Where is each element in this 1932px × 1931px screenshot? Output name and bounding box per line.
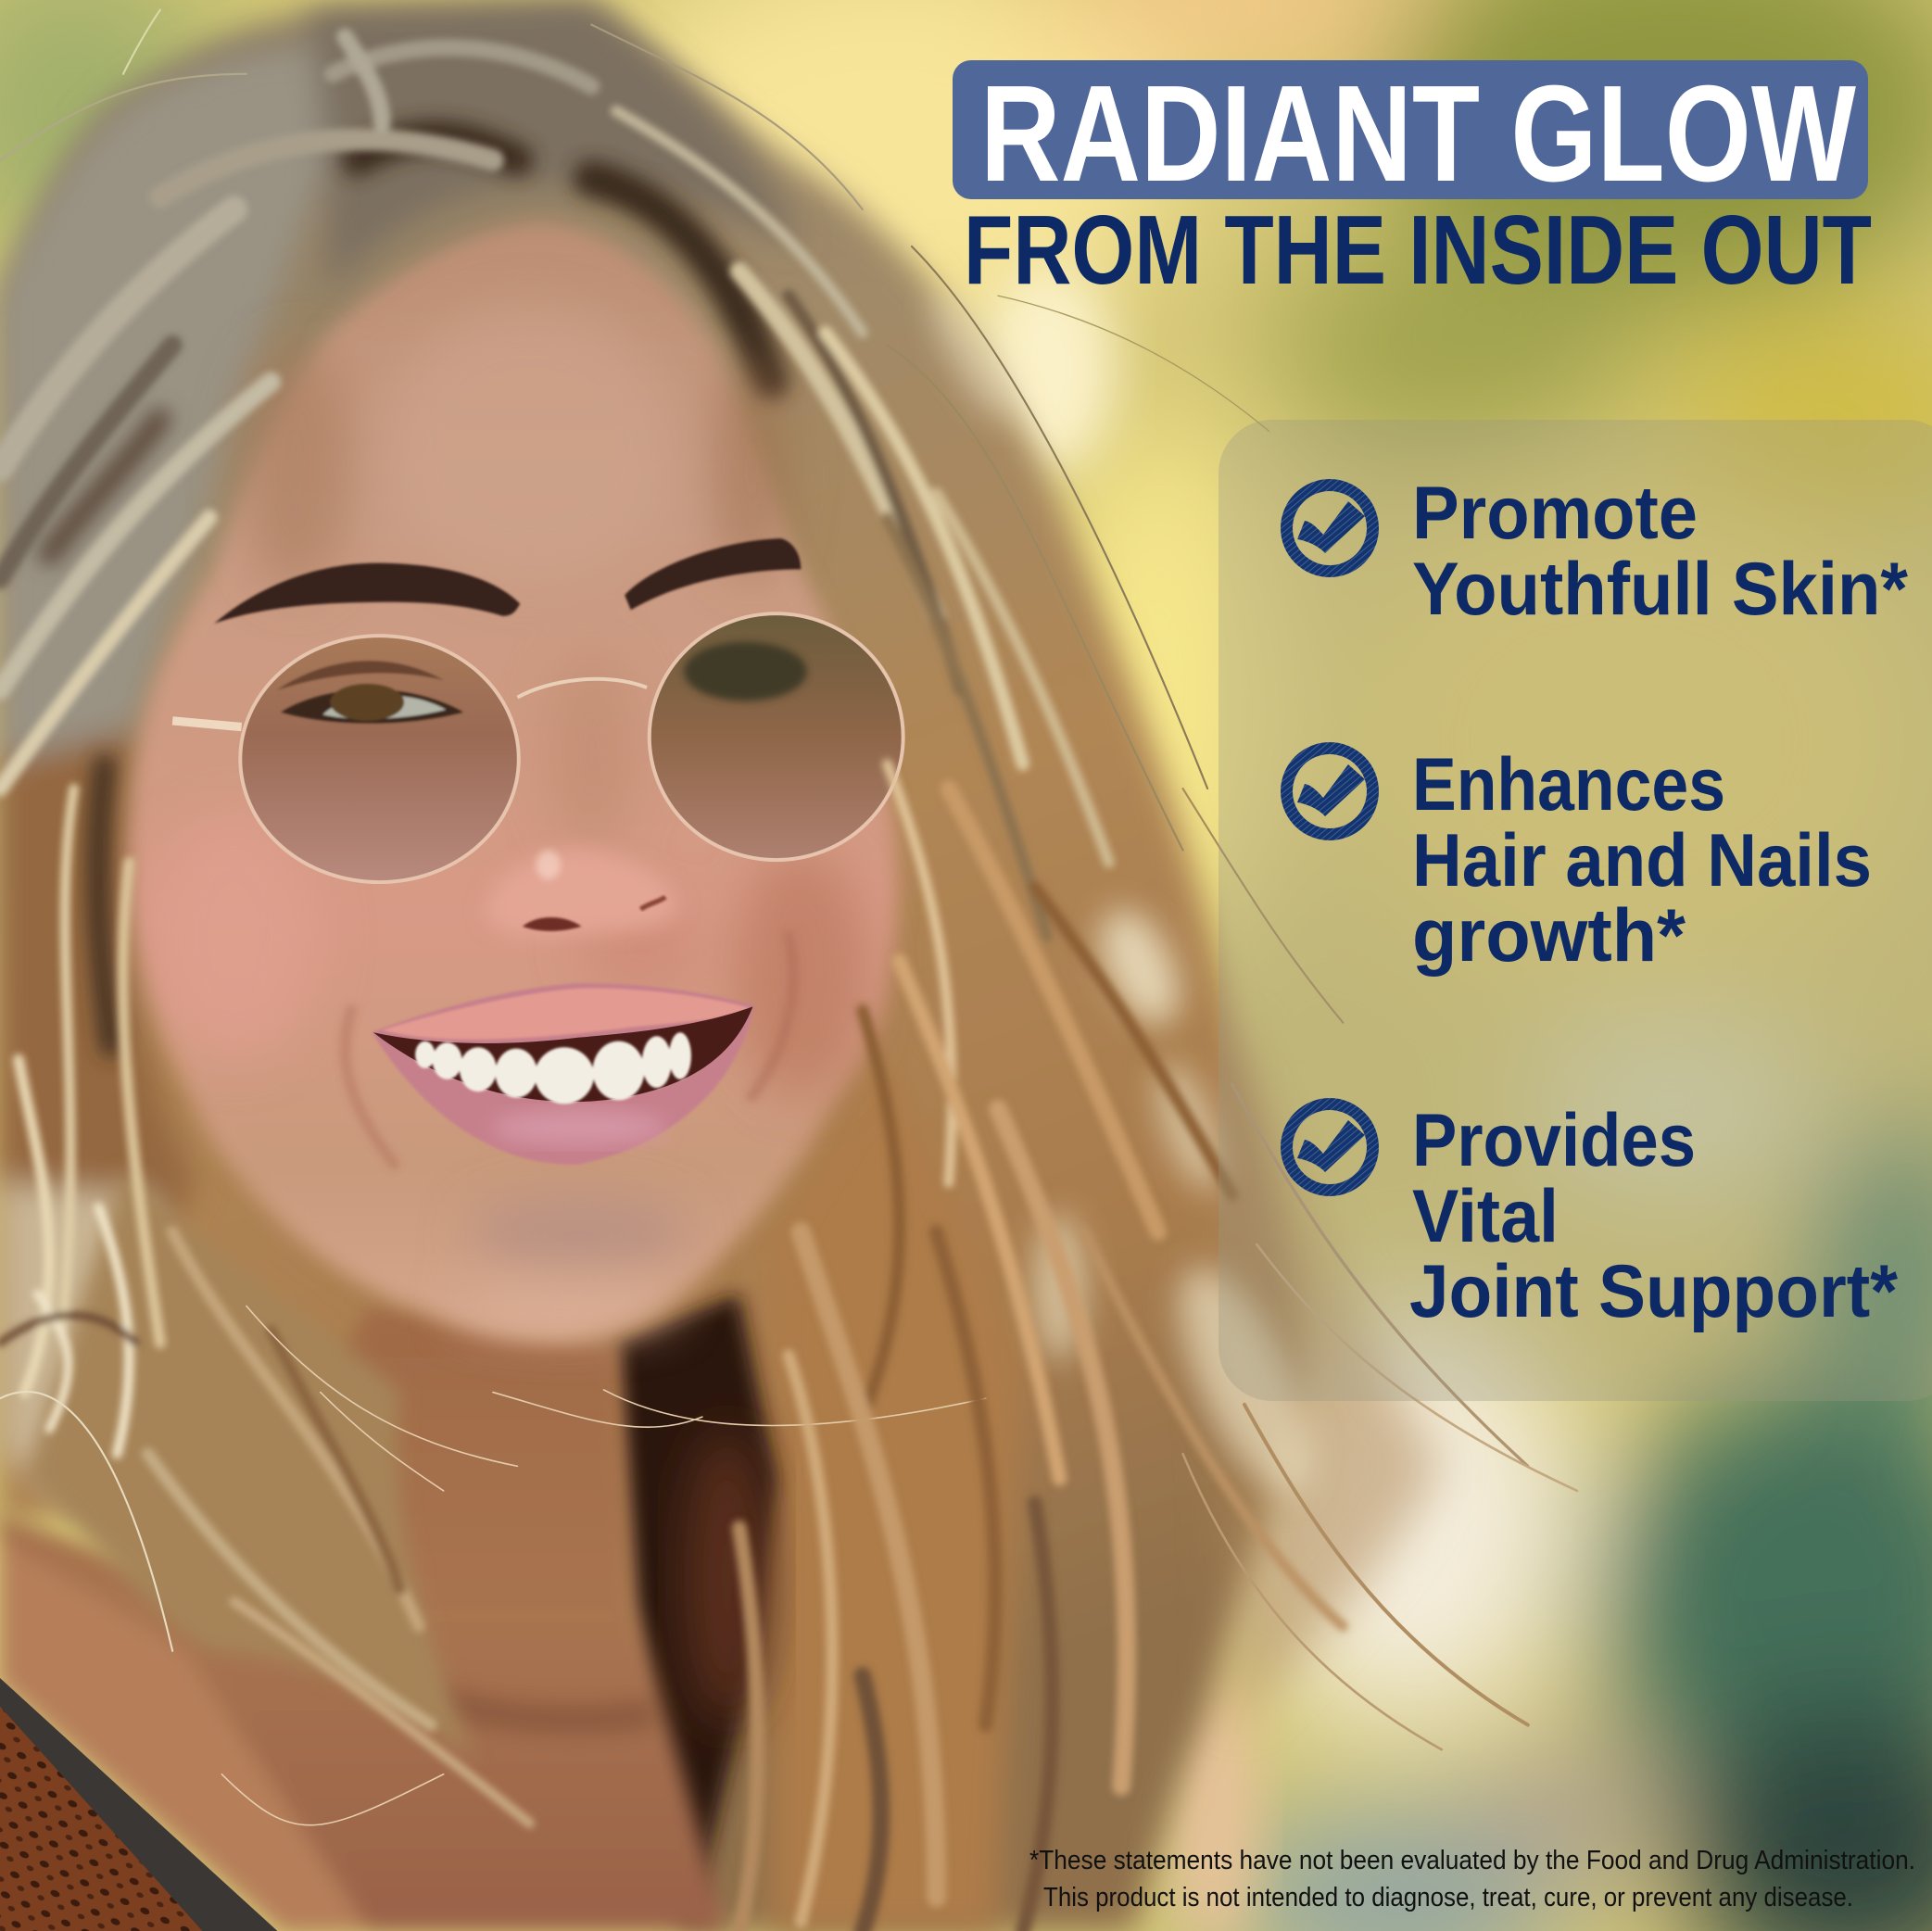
benefit text 3: Provides xyxy=(1412,1099,1696,1182)
benefit text 2: Hair and Nails xyxy=(1412,819,1872,902)
sunglasses xyxy=(172,613,903,882)
bright gaps between hair strands xyxy=(917,283,1337,1510)
hair strands over the face edge and shoulders xyxy=(0,37,1343,1931)
benefit 1 xyxy=(1286,472,1908,631)
neck and chest xyxy=(0,1306,727,1931)
hair lying across the neck xyxy=(25,1170,986,1825)
disclaimer: This product is not intended to diagnose, treat, cure, or prevent any disease. xyxy=(1043,1883,1853,1912)
grey-blonde crown and left side xyxy=(0,5,1023,1931)
wispy flyaway hairs xyxy=(0,10,1577,1749)
benefit text 2: Enhances xyxy=(1412,743,1725,827)
dark hairline shadows xyxy=(49,137,770,1047)
benefit text 1: Youthfull Skin* xyxy=(1412,548,1908,631)
benefit text 3: Vital xyxy=(1412,1175,1559,1258)
disclaimer xyxy=(1029,1846,1915,1912)
benefit text 1: Promote xyxy=(1412,472,1698,555)
benefit 2 xyxy=(1286,743,1872,978)
benefit text 2: growth* xyxy=(1412,894,1686,978)
hair mass xyxy=(0,3,1442,1931)
face shading xyxy=(148,308,868,1328)
bridge and temple xyxy=(517,679,647,698)
mouth interior xyxy=(373,1006,752,1102)
benefit text 2 xyxy=(1412,743,1872,978)
benefit text 3 xyxy=(1409,1099,1898,1333)
icon: check mark 1 xyxy=(1286,486,1373,571)
icon: check mark 2 xyxy=(1286,749,1373,834)
clothing neckline xyxy=(0,1678,279,1931)
translucent hair fringe fading into the background xyxy=(1221,1010,1442,1725)
teeth xyxy=(415,1032,691,1104)
icon: check mark 3 xyxy=(1286,1104,1373,1190)
smile creases xyxy=(345,937,793,1165)
lens left xyxy=(240,636,519,882)
face xyxy=(130,221,898,1341)
dark shadow beside the neck xyxy=(616,1294,777,1931)
benefit text 3: Joint Support* xyxy=(1409,1250,1898,1333)
nose xyxy=(485,848,680,936)
smile xyxy=(373,983,754,1165)
panel: benefits background xyxy=(1219,420,1932,1401)
lens right xyxy=(650,613,903,860)
benefit text 1 xyxy=(1412,472,1908,631)
eyebrows xyxy=(214,538,801,624)
benefit 3 xyxy=(1286,1099,1898,1333)
eyes behind lenses xyxy=(277,642,807,724)
